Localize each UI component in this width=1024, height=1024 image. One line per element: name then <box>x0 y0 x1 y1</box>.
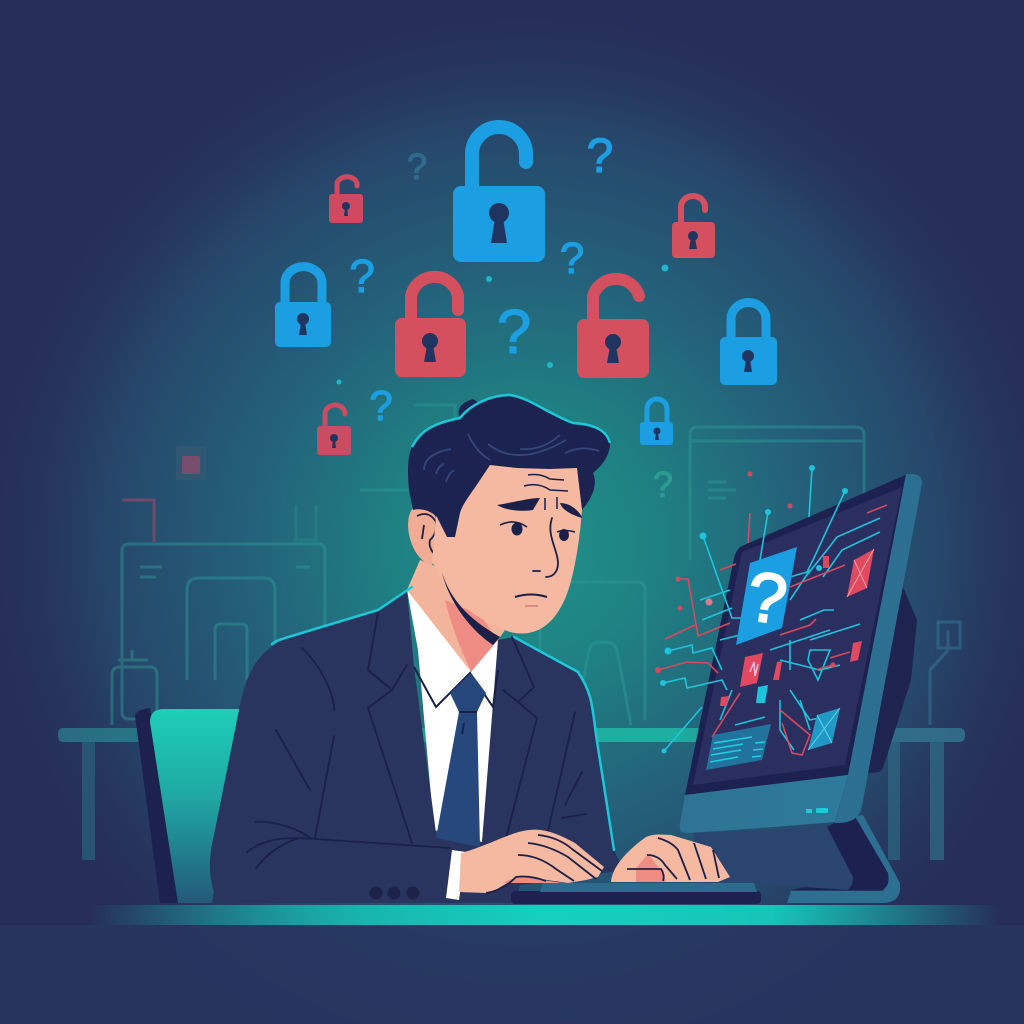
eyes <box>500 522 575 541</box>
floating question marks <box>349 130 613 429</box>
small red square <box>720 696 729 706</box>
jacket buttons <box>370 886 420 900</box>
monitor chin <box>680 775 848 833</box>
floating question marks: ? <box>587 130 613 183</box>
small red block <box>773 661 782 680</box>
power lights <box>806 808 828 813</box>
floating question marks: ? <box>497 298 531 367</box>
blue X card <box>808 708 840 750</box>
table front shade <box>0 925 1024 1024</box>
text panel <box>706 724 771 770</box>
screen <box>693 487 902 785</box>
blue question card: ? <box>742 557 792 639</box>
left hand <box>459 830 604 893</box>
head <box>408 395 610 645</box>
red X card <box>847 549 874 597</box>
ghost red marker <box>122 446 206 542</box>
monitor bezel <box>685 473 910 795</box>
foreground table <box>90 905 1000 925</box>
floating question marks: ? <box>369 382 393 429</box>
icon: small red open padlock top right <box>672 196 715 258</box>
icon: blue closed padlock right <box>720 303 777 385</box>
screen circuit lines <box>658 468 887 755</box>
suit rim light <box>272 587 614 850</box>
red rectangle <box>850 641 862 662</box>
hair <box>408 395 610 537</box>
background ghost office <box>112 405 960 725</box>
icon: blue closed padlock left <box>275 267 331 347</box>
floating dots <box>336 264 668 384</box>
neck shadow <box>445 600 498 672</box>
under chin shadow <box>442 572 500 645</box>
red glyph card <box>740 653 763 687</box>
floating question marks: ? <box>407 146 427 187</box>
shirt <box>407 590 498 842</box>
icon: large blue open padlock <box>453 127 545 262</box>
neck <box>407 560 505 672</box>
icon: small blue closed padlock <box>640 399 673 445</box>
floating question marks: ? <box>349 250 375 302</box>
small cyan block <box>756 685 768 703</box>
nose <box>533 518 558 577</box>
icon: small red open padlock lower <box>317 405 351 455</box>
wrinkles <box>524 474 568 510</box>
cuff <box>446 850 466 900</box>
chair <box>135 708 240 903</box>
eyebrows <box>497 498 582 518</box>
hair tuft <box>459 399 479 416</box>
ghost question mark: ? <box>653 464 673 505</box>
mouth <box>515 594 547 606</box>
circuit nodes <box>660 465 848 754</box>
floating question marks: ? <box>560 234 584 283</box>
ear <box>408 508 446 565</box>
icon: red open padlock right <box>577 279 649 378</box>
icon: red open padlock left <box>395 277 466 377</box>
icon: small red open padlock top left <box>329 177 363 223</box>
monitor <box>655 465 922 833</box>
monitor side edge <box>835 474 922 823</box>
tie <box>436 673 486 847</box>
right hand <box>611 834 730 882</box>
blue question card <box>736 547 797 645</box>
suit fold lines <box>247 612 586 868</box>
hair strands <box>424 434 599 482</box>
face <box>432 460 582 633</box>
background desk <box>58 728 965 860</box>
keyboard <box>511 883 761 904</box>
monitor back and stand <box>693 587 917 903</box>
hair rim light <box>412 395 610 447</box>
collar lines <box>414 667 498 707</box>
suit jacket <box>210 587 625 903</box>
